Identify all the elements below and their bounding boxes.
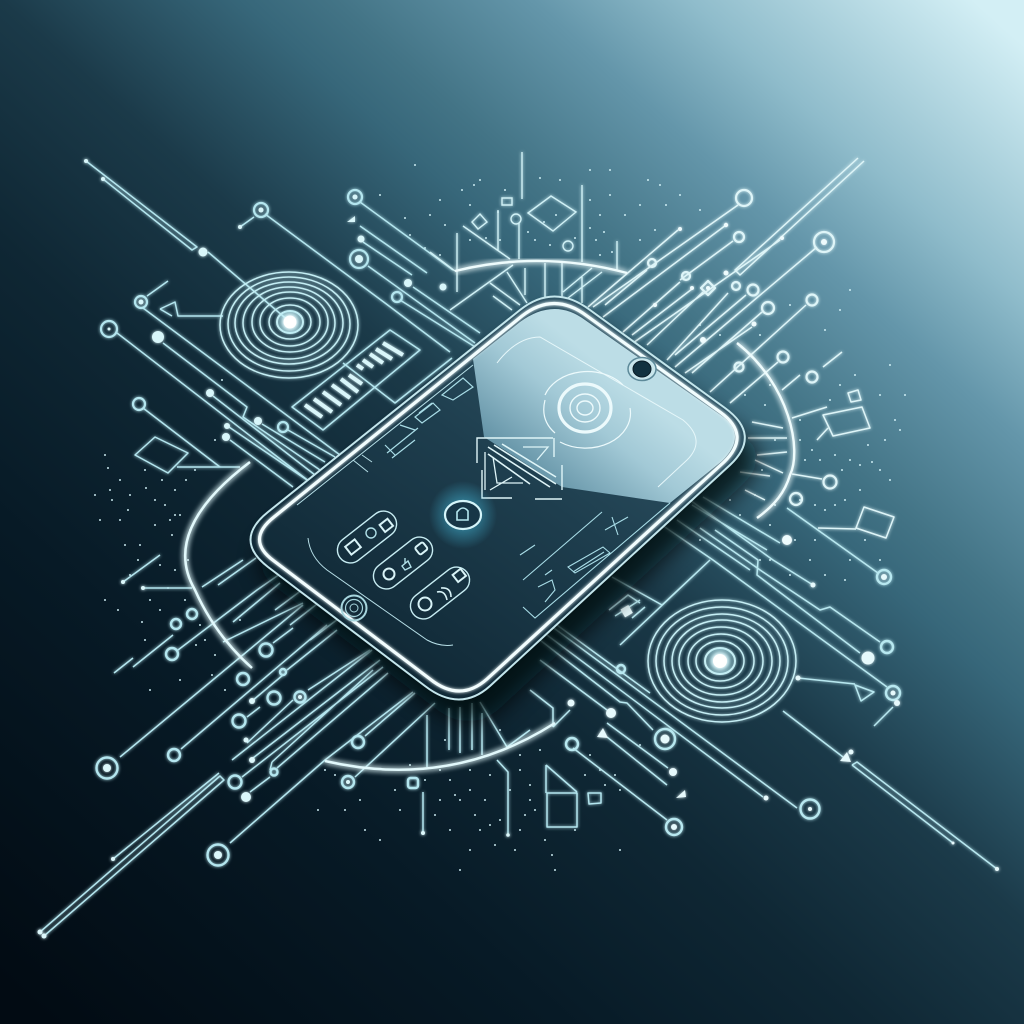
triangle marker	[855, 685, 874, 701]
app pill three	[405, 562, 475, 624]
camera	[628, 358, 656, 380]
glowing arc: top	[455, 261, 627, 273]
glowing arc: right	[737, 343, 794, 518]
south-east nodes	[568, 574, 999, 871]
south-west circuit lines	[40, 555, 601, 936]
south-east circuit lines	[530, 497, 997, 869]
screen inner guide lines	[297, 337, 696, 645]
QR scan frame	[477, 438, 562, 499]
concentric target: south-east	[648, 600, 796, 722]
rectangles on the east side	[792, 390, 894, 538]
north-west circuit lines	[86, 161, 480, 487]
nw markers	[101, 190, 402, 432]
concentric target: north-west	[220, 272, 358, 378]
app pill one	[332, 506, 402, 568]
shape: diamond outline	[135, 437, 240, 473]
radial ticks in east arc	[740, 422, 787, 500]
screen widgets upper left	[385, 378, 473, 458]
home button	[342, 596, 366, 620]
phone shadow	[260, 318, 757, 722]
phone body	[250, 296, 745, 700]
lock icon with blue halo	[429, 481, 497, 549]
smartphone	[250, 296, 745, 700]
phone bezel	[250, 296, 745, 700]
glowing arc: bottom	[325, 723, 555, 770]
glossy reflection	[473, 309, 735, 503]
north-east circuit lines	[588, 158, 894, 538]
app pill two	[368, 532, 438, 594]
north-west nodes	[84, 159, 446, 441]
north circuit lines and shapes	[430, 152, 617, 310]
screen target icon	[544, 372, 630, 448]
screen widgets lower right	[520, 503, 670, 618]
data panel outline	[292, 330, 473, 467]
glowing arc: left	[185, 462, 252, 668]
small chip icon	[609, 595, 645, 618]
north-east nodes	[653, 223, 827, 545]
particle dust	[95, 165, 905, 870]
signal bars panel	[305, 343, 403, 417]
south-west nodes	[38, 580, 510, 938]
